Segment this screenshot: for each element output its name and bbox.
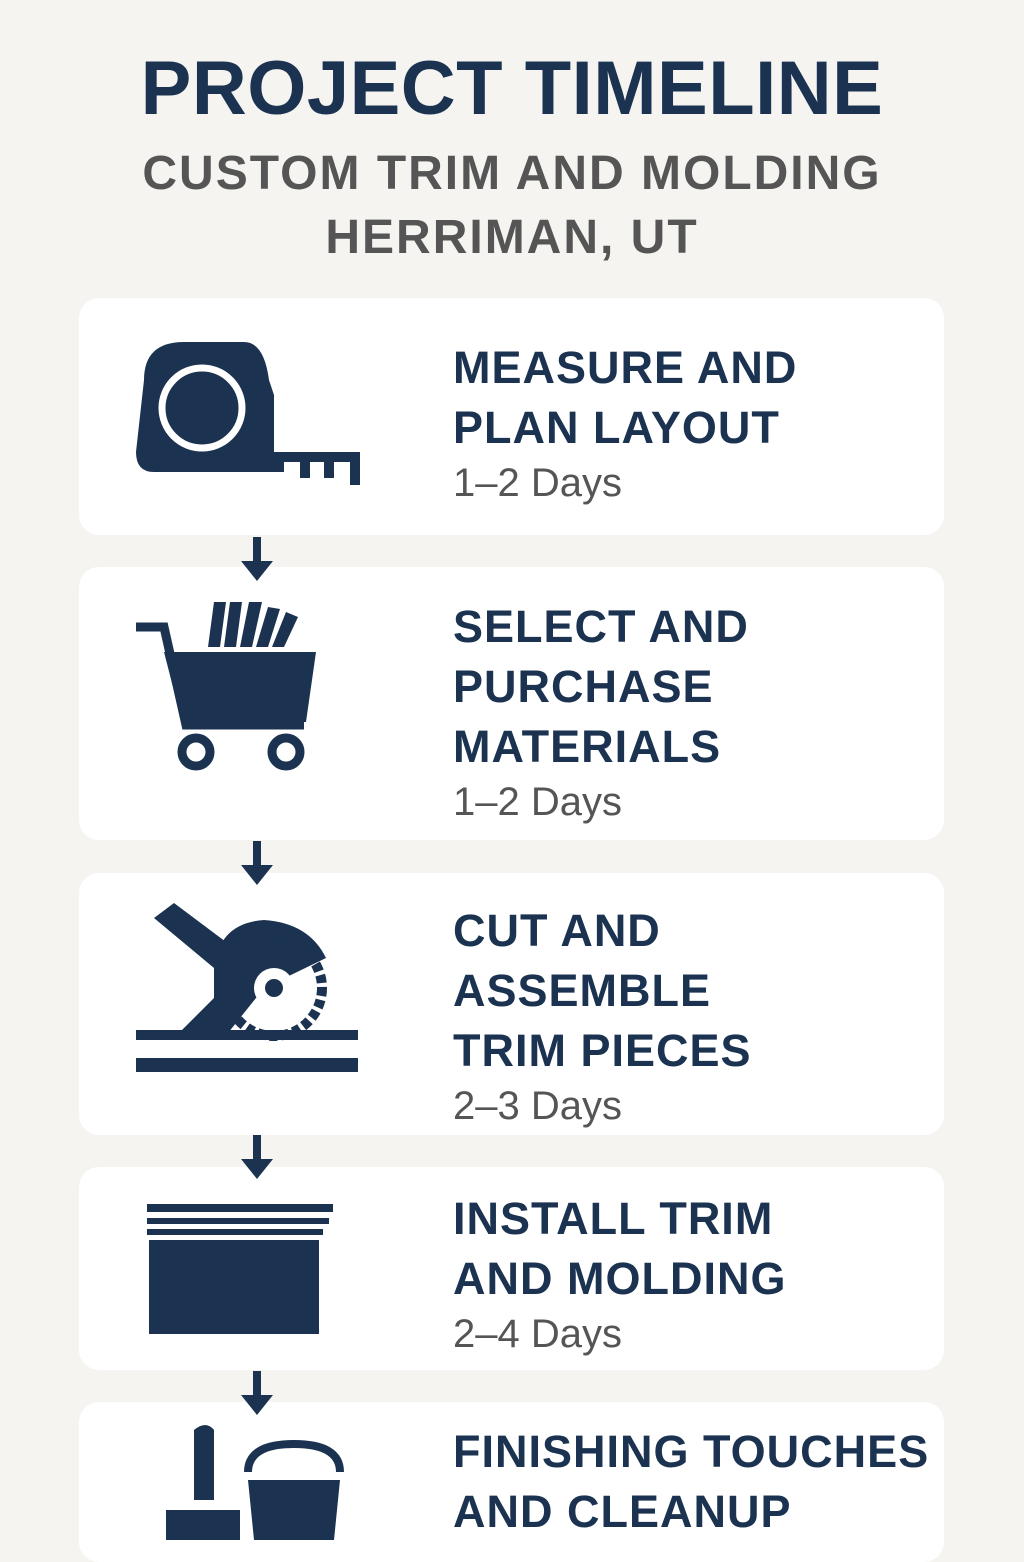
arrow 4: [241, 1371, 273, 1415]
text: step 2: SELECT AND: [453, 601, 749, 652]
subtitle: [142, 147, 882, 264]
panel: step 1: [79, 298, 944, 535]
icon: cart: [136, 602, 316, 770]
text: step 1: [453, 342, 797, 505]
text: step 2: MATERIALS: [453, 721, 721, 772]
panel: step 5: [79, 1402, 944, 1562]
arrow 3: [241, 1135, 273, 1179]
text: step 3: [453, 905, 752, 1128]
text: step 3: TRIM PIECES: [453, 1025, 752, 1076]
panel: step 3: [79, 873, 944, 1135]
subtitle: HERRIMAN, UT: [325, 211, 699, 264]
text: step 3: ASSEMBLE: [453, 965, 711, 1016]
text: step 5: AND CLEANUP: [453, 1486, 792, 1537]
arrow 1: [241, 537, 273, 581]
icon: saw: [136, 903, 358, 1072]
icon: brush and bucket: [166, 1425, 344, 1540]
text: step 5: [453, 1426, 929, 1537]
icon: tape measure: [136, 342, 360, 485]
panel: step 2: [79, 567, 944, 840]
arrow 2: [241, 841, 273, 885]
text: step 2: PURCHASE: [453, 661, 714, 712]
text: step 4: INSTALL TRIM: [453, 1193, 773, 1244]
text: step 3: 2–3 Days: [453, 1084, 622, 1128]
icon: molding: [147, 1204, 333, 1334]
text: step 2: 1–2 Days: [453, 780, 622, 824]
text: step 4: 2–4 Days: [453, 1312, 622, 1356]
text: step 2: [453, 601, 749, 824]
panel: step 4: [79, 1167, 944, 1370]
text: step 4: [453, 1193, 786, 1356]
text: step 1: PLAN LAYOUT: [453, 402, 780, 453]
text: step 1: 1–2 Days: [453, 461, 622, 505]
text: step 3: CUT AND: [453, 905, 661, 956]
subtitle: CUSTOM TRIM AND MOLDING: [142, 147, 882, 200]
text: step 4: AND MOLDING: [453, 1253, 786, 1304]
text: step 5: FINISHING TOUCHES: [453, 1426, 929, 1477]
text: step 1: MEASURE AND: [453, 342, 797, 393]
title: PROJECT TIMELINE: [141, 46, 883, 131]
